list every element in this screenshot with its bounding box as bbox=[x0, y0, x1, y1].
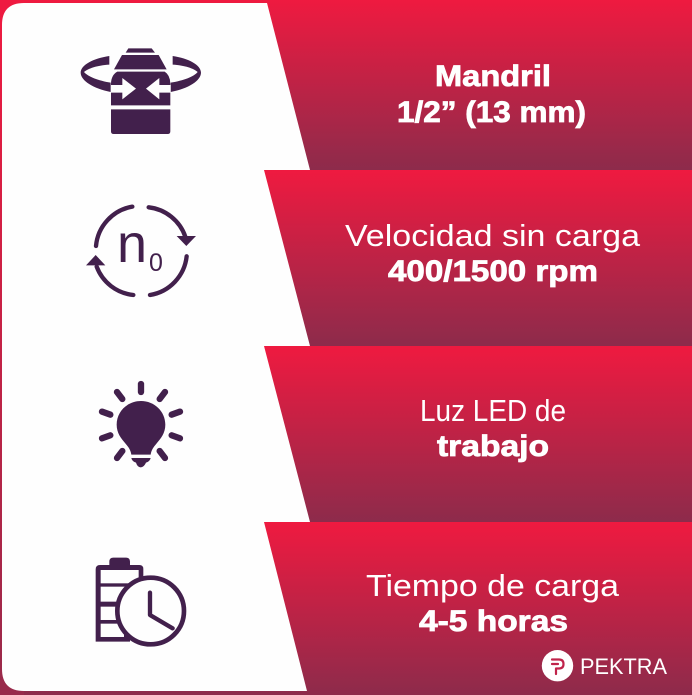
text: charge time spec: Tiempo de carga bbox=[366, 568, 620, 603]
icon: battery with clock bbox=[96, 558, 184, 644]
text: no-load speed spec: Velocidad sin carga bbox=[345, 218, 641, 253]
panel: white icon column bbox=[2, 3, 310, 691]
text: chuck spec: 1/2” (13 mm) bbox=[397, 96, 586, 129]
text: charge time spec: 4-5 horas bbox=[419, 605, 568, 638]
text: LED light spec: Luz LED de bbox=[420, 393, 566, 428]
icon: no-load speed: 0 bbox=[149, 249, 163, 277]
icon: no-load speed bbox=[86, 207, 196, 295]
icon: no-load speed: n bbox=[117, 214, 147, 274]
text: no-load speed spec bbox=[345, 218, 641, 288]
logo: Pektra: PEKTRA bbox=[580, 654, 667, 679]
text: charge time spec bbox=[366, 568, 620, 638]
text: chuck spec bbox=[397, 60, 586, 129]
logo: Pektra bbox=[542, 650, 667, 681]
text: chuck spec: Mandril bbox=[435, 60, 551, 93]
text: LED light spec: trabajo bbox=[437, 430, 549, 463]
icon: chuck with rotation ring bbox=[81, 48, 201, 134]
icon: LED light bulb bbox=[102, 384, 180, 467]
text: LED light spec bbox=[420, 393, 566, 463]
text: no-load speed spec: 400/1500 rpm bbox=[388, 255, 598, 288]
